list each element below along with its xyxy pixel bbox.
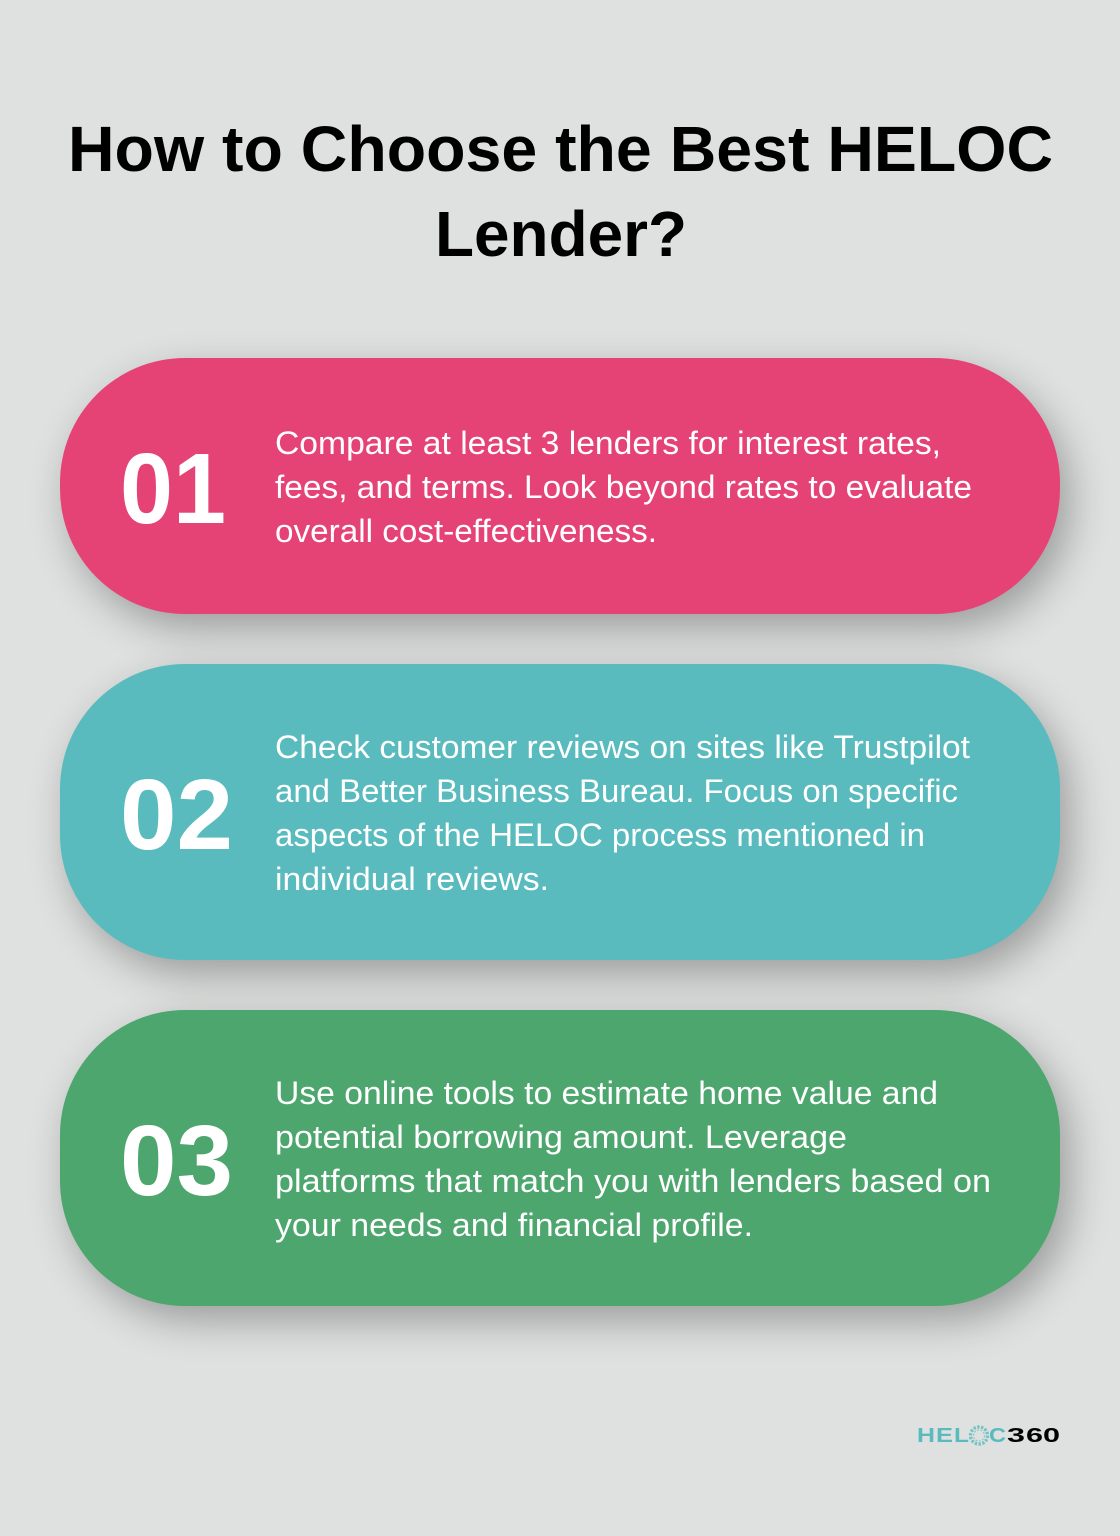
step 3 text: platforms that match you with lenders based on (275, 1163, 991, 1199)
title: How to Choose the Best HELOC (68, 113, 1053, 185)
step 1 text: Compare at least 3 lenders for interest rates, (275, 425, 941, 461)
step 2 text: Check customer reviews on sites like Trustpilot (275, 729, 970, 765)
step 3 number: 03 (120, 1105, 233, 1217)
step 2 number: 02 (120, 759, 233, 871)
icon: logo swirl (970, 1427, 988, 1444)
step 3 text: potential borrowing amount. Leverage (275, 1119, 847, 1155)
step 1 text (275, 425, 972, 549)
step 2 text (275, 729, 970, 897)
step 2 text: aspects of the HELOC process mentioned in (275, 817, 925, 853)
step 1 number: 01 (120, 433, 226, 545)
step 3 text (275, 1075, 991, 1243)
logo: HELOC360 (917, 1425, 1060, 1447)
title: Lender? (435, 198, 687, 270)
logo: HELOC360: H (917, 1425, 935, 1447)
logo: HELOC360: E (936, 1425, 953, 1447)
panel: card 3 background (60, 1010, 1060, 1306)
logo: HELOC360: 6 (1026, 1425, 1043, 1447)
title (68, 113, 1053, 270)
panel: card 2 background (60, 664, 1060, 960)
step 3 text: Use online tools to estimate home value and (275, 1075, 938, 1111)
logo: HELOC360: C (989, 1425, 1006, 1447)
step 2 text: and Better Business Bureau. Focus on specific (275, 773, 958, 809)
logo: HELOC360: L (954, 1425, 969, 1447)
logo: HELOC360: 0 (1043, 1425, 1060, 1447)
step 1 text: overall cost-effectiveness. (275, 513, 657, 549)
step 3 text: your needs and financial profile. (275, 1207, 753, 1243)
step 2 text: individual reviews. (275, 861, 549, 897)
step 1 text: fees, and terms. Look beyond rates to evaluate (275, 469, 972, 505)
panel: card 1 background (60, 358, 1060, 614)
logo: HELOC360: 3 (1007, 1425, 1025, 1447)
